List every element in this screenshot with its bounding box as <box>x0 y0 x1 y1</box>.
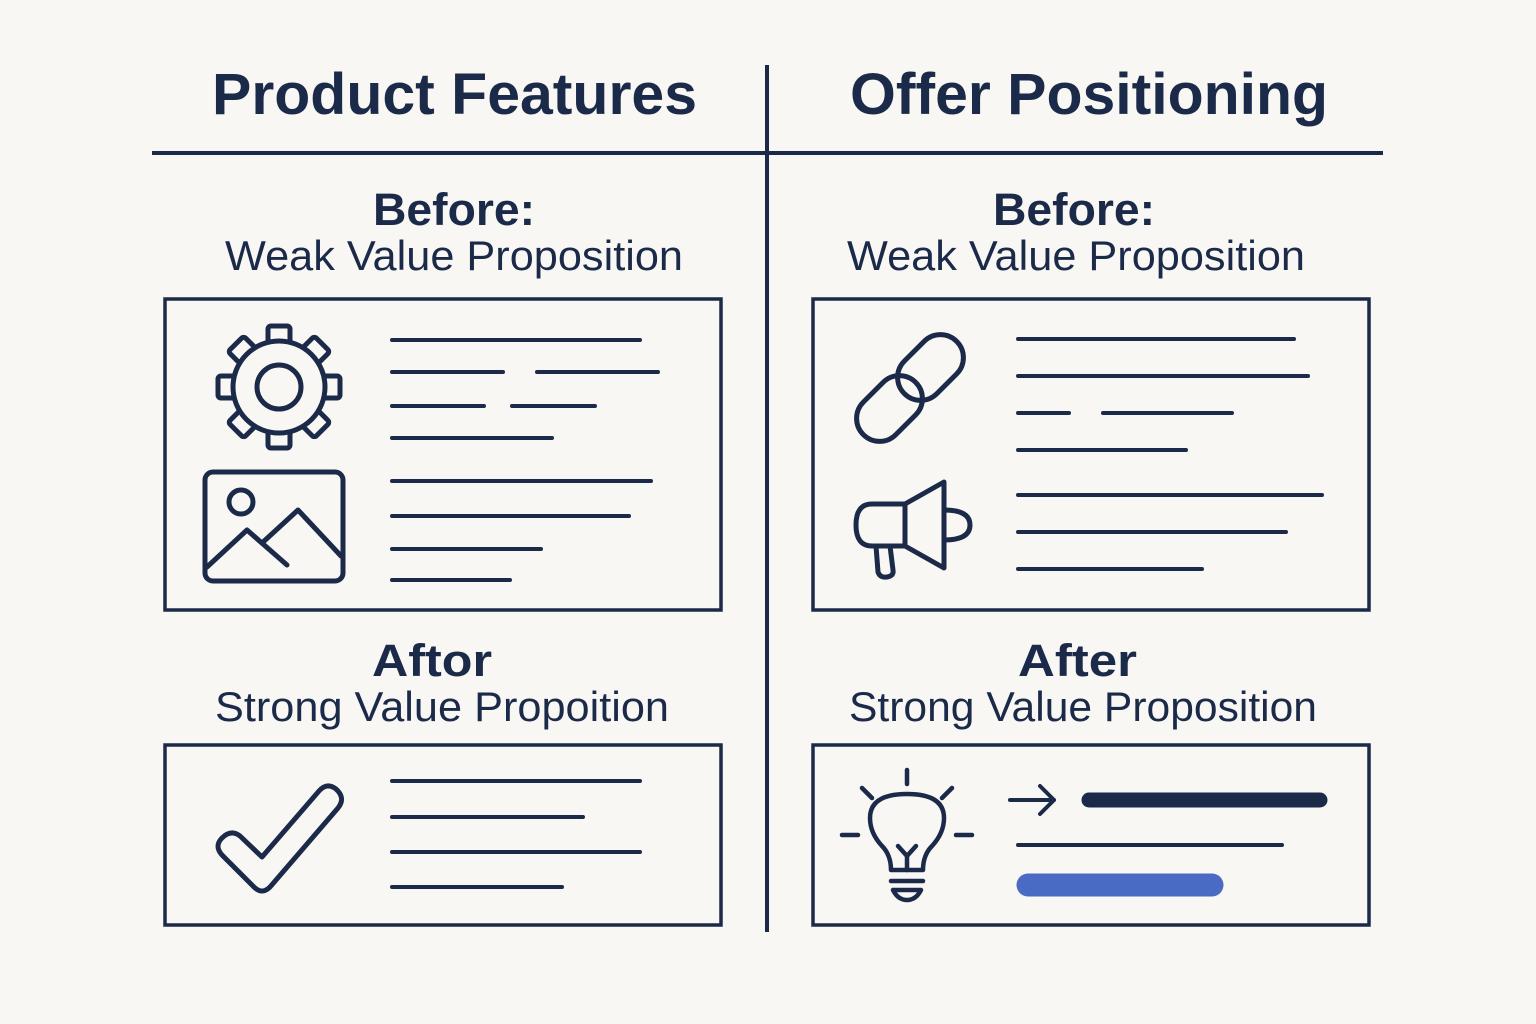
heading: right after <box>849 635 1317 730</box>
icon: megaphone <box>856 482 970 577</box>
heading: right before: Before: <box>993 184 1155 235</box>
heading: right after: Strong Value Proposition <box>849 683 1317 730</box>
icon: chain link <box>847 325 973 451</box>
panel: product features after <box>165 745 721 925</box>
title: Offer Positioning: Offer Positioning <box>850 62 1328 127</box>
icon: arrow <box>1010 786 1054 814</box>
heading: left after: Aftor <box>372 635 492 686</box>
panel: offer positioning after <box>813 745 1369 925</box>
icon: image <box>205 472 343 581</box>
title: Product Features: Product Features <box>212 62 697 127</box>
panel: offer positioning before <box>813 299 1369 610</box>
icon: lightbulb <box>842 770 972 900</box>
heading: left before <box>225 184 683 279</box>
heading: left before: Before: <box>373 184 535 235</box>
heading: left before: Weak Value Proposition <box>225 232 683 279</box>
icon: gear <box>218 326 340 448</box>
icon: checkmark <box>218 786 342 891</box>
heading: left after: Strong Value Propoition <box>215 683 669 730</box>
heading: right before <box>847 184 1305 279</box>
heading: right after: After <box>1018 635 1137 686</box>
heading: left after <box>215 635 669 730</box>
panel: product features before <box>165 299 721 610</box>
heading: right before: Weak Value Proposition <box>847 232 1305 279</box>
